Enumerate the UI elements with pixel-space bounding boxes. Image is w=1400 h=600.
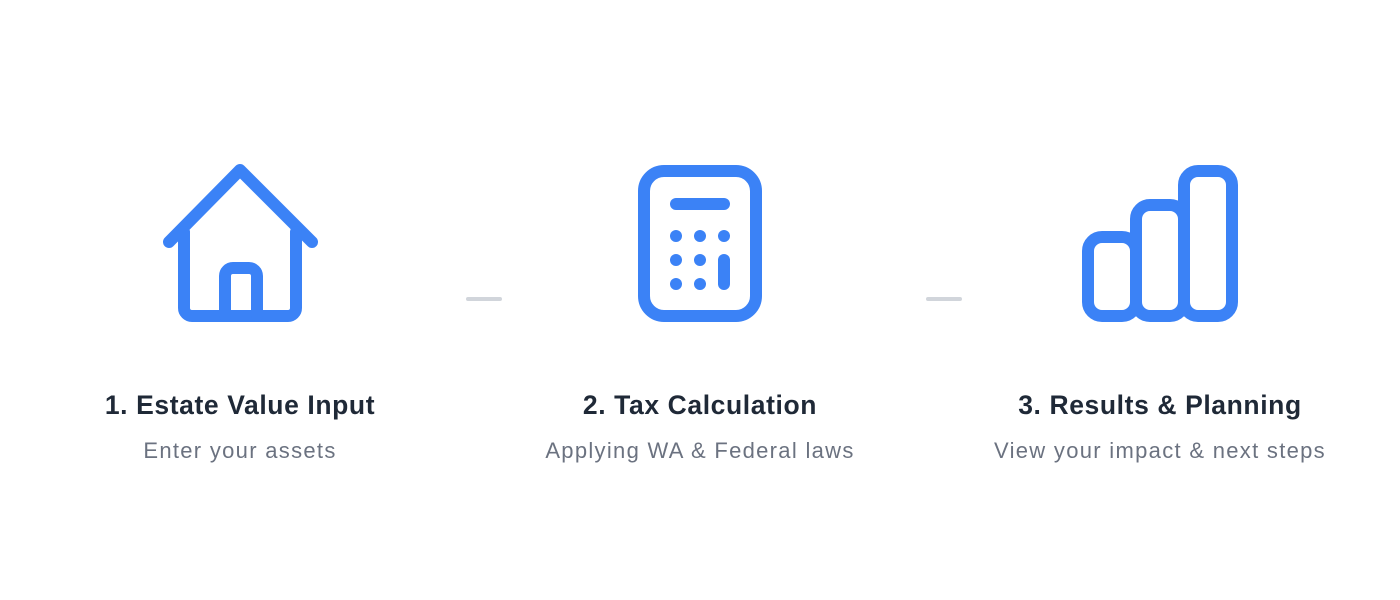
step 2 subtitle: Applying WA & Federal laws — [545, 438, 855, 463]
connector 2 — [928, 297, 960, 301]
step 1 subtitle: Enter your assets — [143, 438, 337, 463]
icon: house — [169, 170, 312, 316]
connector 1 — [468, 297, 500, 301]
step 3 subtitle: View your impact & next steps — [994, 438, 1326, 463]
icon: bar chart — [1088, 171, 1232, 316]
step 2 title: 2. Tax Calculation — [583, 390, 817, 420]
step 1 title: 1. Estate Value Input — [105, 390, 375, 420]
icon: calculator — [644, 171, 756, 316]
step 3 title: 3. Results & Planning — [1018, 390, 1302, 420]
